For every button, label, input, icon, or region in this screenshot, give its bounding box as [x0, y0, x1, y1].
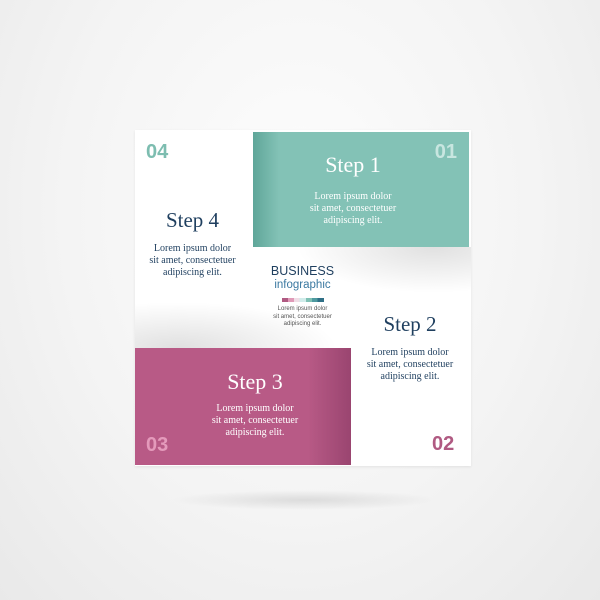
center title: sit amet, consectetuer: [273, 314, 332, 320]
heading step 3: Step 3: [227, 369, 283, 394]
center title: BUSINESS: [271, 264, 334, 278]
text step 2: sit amet, consectetuer: [367, 359, 453, 370]
panel: white square: [135, 130, 471, 466]
number 04: 04: [146, 141, 168, 163]
shadow under step 1: [285, 247, 471, 297]
text step 4: [149, 243, 236, 278]
shadow above step 3: [135, 298, 351, 348]
center title: infographic: [274, 279, 331, 291]
text step 3: sit amet, consectetuer: [212, 415, 298, 426]
text step 3: adipiscing elit.: [226, 427, 284, 438]
number 02: 02: [432, 433, 454, 455]
heading step 4: Step 4: [166, 208, 219, 232]
text step 3: Lorem ipsum dolor: [216, 403, 294, 414]
center title: Lorem ipsum dolor: [278, 306, 327, 312]
number 01: 01: [435, 141, 457, 163]
text step 2: Lorem ipsum dolor: [371, 347, 449, 358]
text step 1: sit amet, consectetuer: [310, 203, 396, 214]
color bar: [282, 298, 324, 302]
heading step 1: Step 1: [325, 152, 381, 177]
text step 2: [367, 347, 454, 382]
text step 1: Lorem ipsum dolor: [314, 191, 392, 202]
text step 1: [310, 191, 396, 226]
center title: [271, 264, 334, 327]
text step 4: adipiscing elit.: [163, 267, 222, 278]
floor shadow: [170, 490, 440, 510]
text step 4: Lorem ipsum dolor: [154, 243, 231, 254]
text step 4: sit amet, consectetuer: [149, 255, 236, 266]
number 03: 03: [146, 434, 168, 456]
panel: step 1: [253, 132, 469, 247]
text step 3: [212, 403, 298, 438]
center title: adipiscing elit.: [284, 321, 321, 327]
text step 2: adipiscing elit.: [381, 371, 439, 382]
panel: step 3: [135, 348, 351, 465]
heading step 2: Step 2: [383, 312, 437, 336]
text step 1: adipiscing elit.: [324, 215, 382, 226]
